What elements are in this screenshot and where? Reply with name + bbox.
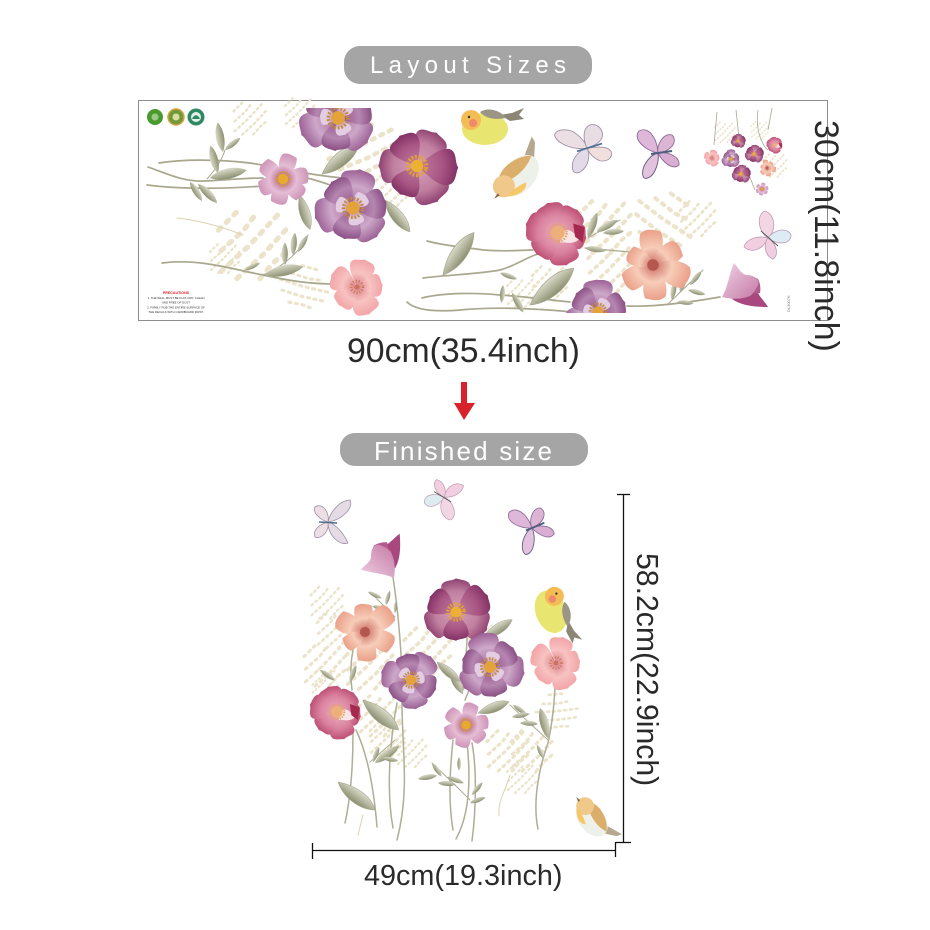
flower: plum clipped at top [299,108,374,151]
stems on sheet [147,150,720,312]
height label: 58.2cm: 58.2cm(22.9inch) [630,553,663,786]
leaves on sheet [188,122,706,314]
butterfly: pink [421,475,469,524]
flower: large plum [304,162,399,251]
icon: three eco badges [147,108,204,126]
fern backgrounds [304,587,583,793]
butterfly: purple [507,502,558,556]
hanging small flower cluster [703,108,787,196]
flower: salmon [615,223,699,309]
heading pill: Layout Sizes [344,46,592,84]
heading pill: Finished size: Finished size [374,436,552,466]
flower: tulip [722,263,768,307]
arrow: red down [454,382,475,420]
height dimension line [616,494,631,842]
bird: tan [484,137,556,211]
flower: tulip [358,534,403,581]
text: precautions [147,291,205,314]
width label: 90cm: 90cm(35.4inch) [347,332,580,370]
flower: rose [522,198,589,269]
butterfly: pink [744,211,791,259]
width dimension line [312,842,616,859]
flower: large magenta [364,113,473,219]
bird: yellow [461,108,524,145]
flower: coral pink [527,634,581,694]
text: product code: DL3007K [786,295,791,312]
butterfly: purple [637,130,679,178]
flower: salmon [322,584,413,674]
leaves [319,590,553,816]
bird: tan [565,790,622,851]
fern backgrounds on sheet [210,98,716,317]
heading pill: Layout Sizes: Layout Sizes [370,52,566,79]
text: precautions: AND FREE OF DUST [162,300,190,304]
height label: 30cm: 30cm(11.8inch) [807,120,845,352]
text: precautions: 1. THE WALL MUST BE FLAT, DRY, CLEAN [148,296,204,300]
flower: small pink-magenta [442,701,490,749]
flower: small pink-magenta [256,152,310,206]
stems [345,577,555,841]
width label: 49cm: 49cm(19.3inch) [364,860,562,892]
butterfly: pale blue [314,500,351,544]
flower: large plum [451,623,531,708]
panel: finished arrangement [304,475,622,851]
butterfly: pale blue [554,123,613,174]
text: precautions: 2. FIRMLY RUB THE ENTIRE SURFACE OF [147,306,205,310]
panel: layout sheet [138,78,828,343]
bird: yellow [529,584,582,652]
text: precautions: THE DECALS WITH CARDBOARD FIRST. [148,310,204,314]
flower: plum centre [366,635,455,722]
flower: coral pink [326,256,384,320]
heading pill: Finished size [340,433,588,466]
flower: large magenta [414,570,500,653]
flower: rose [307,683,363,742]
text: precautions: PRECAUTIONS [163,291,190,295]
flower: plum clipped at bottom [566,280,626,313]
